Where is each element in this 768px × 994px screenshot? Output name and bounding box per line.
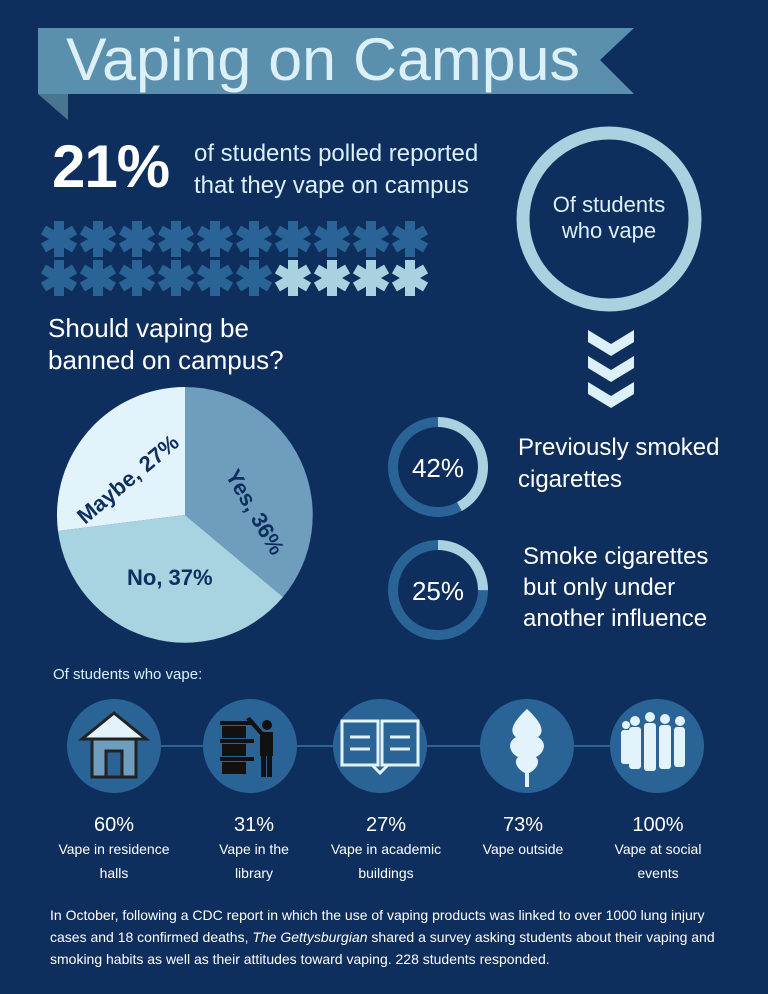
stat 100%: Vape at social	[615, 841, 701, 857]
stat 60%: halls	[100, 865, 128, 881]
stat 60%	[58, 814, 170, 881]
chevron arrows	[588, 330, 634, 408]
footer text: In October, following a CDC report in which the use of vaping products was linked to over 1000 lung injury cases and 18 confirmed deaths, The Gettysburgian shared a survey asking students about their vaping and smoking habits as well as their attitudes toward vaping. 228 students responded.	[50, 907, 715, 967]
stat 21%: that they vape on campus	[194, 172, 469, 199]
pie chart	[57, 387, 313, 643]
icon: crowd	[621, 712, 685, 771]
stat 21%: of students polled reported	[194, 140, 478, 167]
icon: library	[220, 717, 273, 777]
ring 42%	[388, 417, 488, 517]
pie chart: Yes, 36%	[221, 465, 289, 559]
ring 42%: 42%	[412, 453, 464, 483]
text previously smoked	[518, 434, 719, 493]
big ring: of students who vape	[516, 126, 702, 312]
text smoke under influence	[523, 543, 708, 632]
stat 27%: 27%	[366, 814, 406, 836]
text smoke under influence: but only under	[523, 574, 675, 601]
pie chart: No, 37%	[127, 565, 213, 590]
icon: leaf	[510, 709, 544, 787]
stat 27%: Vape in academic	[331, 841, 441, 857]
text smoke under influence: another influence	[523, 605, 707, 632]
ring 25%	[388, 540, 488, 640]
big ring: of students who vape: who vape	[561, 218, 656, 243]
stat 73%	[482, 814, 563, 857]
asterisk pictogram	[41, 221, 428, 296]
text previously smoked: Previously smoked	[518, 434, 719, 461]
ring 25%: 25%	[412, 576, 464, 606]
stat 100%	[614, 814, 701, 881]
stat 27%: buildings	[358, 865, 414, 881]
stat 31%: Vape in the	[219, 841, 289, 857]
question heading: Should vaping be	[48, 313, 249, 343]
big ring: of students who vape: Of students	[553, 192, 665, 217]
stat 100%: 100%	[632, 814, 684, 836]
title banner	[38, 26, 634, 120]
stat 31%	[219, 814, 289, 881]
stat 73%: 73%	[503, 814, 543, 836]
icon row	[67, 699, 704, 793]
question heading: banned on campus?	[48, 345, 284, 375]
question heading	[48, 313, 284, 375]
icon: house	[82, 713, 146, 777]
stat 27%	[331, 814, 441, 881]
stat 21%	[52, 133, 478, 200]
stat 60%: Vape in residence	[58, 841, 170, 857]
text previously smoked: cigarettes	[518, 466, 622, 493]
stat 31%: library	[235, 865, 273, 881]
subheading: Of students who vape:	[53, 666, 202, 683]
title banner: Vaping on Campus	[66, 26, 580, 93]
stat 60%: 60%	[94, 814, 134, 836]
stat 100%: events	[637, 865, 679, 881]
pie chart: Maybe, 27%	[72, 430, 184, 529]
stat 73%: Vape outside	[483, 841, 563, 857]
stat 21%: 21%	[52, 133, 169, 200]
stat 31%: 31%	[234, 814, 274, 836]
text smoke under influence: Smoke cigarettes	[523, 543, 708, 570]
icon: open book	[342, 721, 418, 773]
